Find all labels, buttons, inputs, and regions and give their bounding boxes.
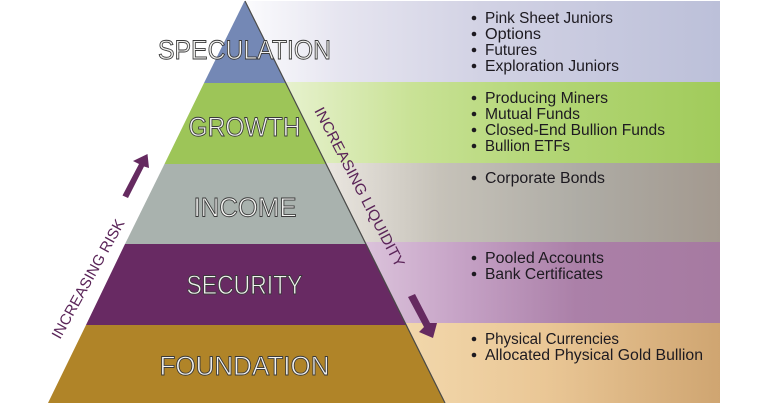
- list: growth items: [472, 90, 665, 155]
- list: security items: Pooled Accounts: [485, 250, 604, 267]
- tier: speculation: [204, 1, 286, 83]
- list: foundation items: [472, 331, 703, 364]
- list: growth items: Mutual Funds: [485, 106, 580, 123]
- tier: income: [125, 164, 366, 244]
- heading: income: INCOME: [194, 192, 296, 222]
- axis: increasing risk: [49, 154, 149, 342]
- list: speculation items: Exploration Juniors: [485, 58, 619, 75]
- arrow: down: [408, 294, 437, 338]
- tier: security: [86, 244, 406, 325]
- tier: growth: [164, 83, 326, 164]
- list: growth items: Producing Miners: [485, 90, 608, 107]
- list: speculation items: Pink Sheet Juniors: [485, 10, 613, 27]
- list: foundation items: Allocated Physical Gold Bullion: [485, 347, 703, 364]
- band: growth holdings: [280, 82, 720, 163]
- axis: increasing liquidity: [310, 104, 437, 338]
- panel: holdings bands: [245, 1, 720, 403]
- list: speculation items: Futures: [485, 42, 537, 59]
- list: security items: Bank Certificates: [485, 266, 603, 283]
- list: growth items: Closed-End Bullion Funds: [485, 122, 665, 139]
- heading: growth: GROWTH: [188, 112, 300, 142]
- pyramid right edge: [245, 1, 445, 403]
- list: income items: Corporate Bonds: [485, 170, 605, 187]
- list: speculation items: Options: [485, 26, 541, 43]
- list: speculation items: [472, 10, 619, 75]
- band: speculation holdings: [245, 1, 720, 82]
- heading: speculation: SPECULATION: [158, 35, 331, 65]
- tier: foundation: [48, 325, 445, 403]
- arrow: up: [122, 154, 149, 198]
- band: foundation holdings: [400, 323, 720, 403]
- band: security holdings: [360, 242, 720, 323]
- tier labels: [158, 35, 331, 381]
- label: increasing liquidity: INCREASING LIQUIDITY: [310, 104, 408, 270]
- heading: security: SECURITY: [186, 270, 302, 300]
- list: security items: [472, 250, 604, 283]
- band: income holdings: [320, 163, 720, 242]
- label: increasing risk: INCREASING RISK: [49, 216, 128, 342]
- heading: foundation: FOUNDATION: [160, 351, 330, 381]
- pyramid: [48, 1, 445, 403]
- list: growth items: Bullion ETFs: [485, 138, 570, 155]
- list: foundation items: Physical Currencies: [485, 331, 619, 348]
